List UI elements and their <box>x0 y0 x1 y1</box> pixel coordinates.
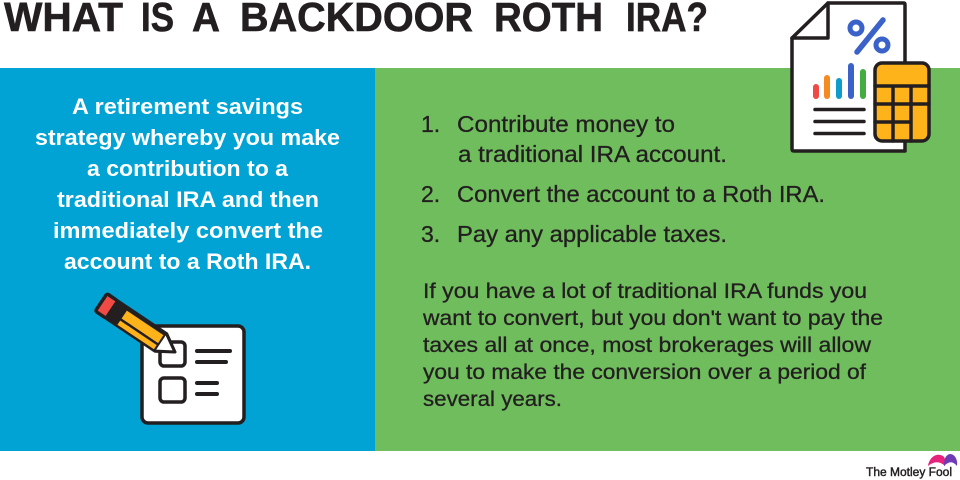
definition text: a contribution to a <box>87 156 289 181</box>
definition text: account to a Roth IRA. <box>64 249 311 274</box>
panel: definition <box>0 68 375 451</box>
explanatory paragraph: you to make the conversion over a period of <box>423 361 866 384</box>
explanatory paragraph: taxes all at once, most brokerages will allow <box>423 334 872 357</box>
title <box>4 0 708 40</box>
definition text: A retirement savings <box>72 94 303 119</box>
numbered steps: a traditional IRA account. <box>458 141 727 167</box>
icon: checklist with pencil <box>95 294 244 423</box>
numbered steps: 3. <box>421 221 440 247</box>
explanatory paragraph: If you have a lot of traditional IRA funds you <box>423 280 867 303</box>
definition text: immediately convert the <box>53 218 323 243</box>
icon: document with calculator <box>792 3 929 151</box>
definition text: traditional IRA and then <box>57 187 319 212</box>
numbered steps <box>421 111 825 247</box>
panel: steps <box>375 68 960 451</box>
explanatory paragraph: want to convert, but you don't want to pay the <box>422 307 883 330</box>
definition text: strategy whereby you make <box>35 125 340 150</box>
numbered steps: Convert the account to a Roth IRA. <box>457 181 825 207</box>
explanatory paragraph: several years. <box>423 388 562 411</box>
numbered steps: Contribute money to <box>457 111 675 137</box>
logo: The Motley Fool <box>866 454 957 479</box>
numbered steps: 1. <box>421 111 440 137</box>
definition text <box>35 94 340 274</box>
explanatory paragraph <box>422 280 883 411</box>
logo: The Motley Fool: The Motley Fool <box>866 465 952 479</box>
numbered steps: Pay any applicable taxes. <box>457 221 727 247</box>
numbered steps: 2. <box>421 181 440 207</box>
